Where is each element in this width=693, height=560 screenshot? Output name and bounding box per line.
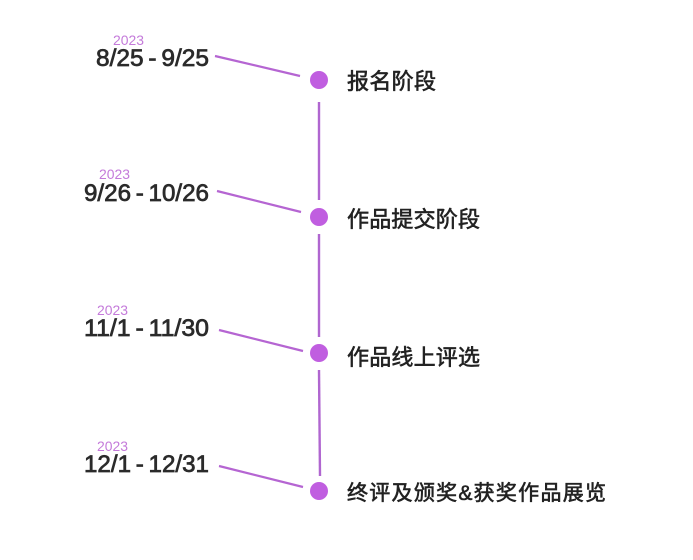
- stage 1: registration: 2023: [113, 32, 144, 48]
- stage 1: registration: 8/25 - 9/25: [96, 45, 209, 72]
- stage 2: submission: 9/26 - 10/26: [84, 180, 209, 207]
- stage 3: online review: [84, 302, 480, 370]
- stage 4: final review and awards: 终评及颁奖&获奖作品展览: [347, 482, 606, 505]
- stage 4: final review and awards: 2023: [97, 438, 128, 454]
- stage 4: final review and awards: 12/1 - 12/31: [84, 451, 209, 478]
- stage 4: final review and awards: [84, 438, 606, 505]
- stage 1: registration: 报名阶段: [347, 69, 436, 94]
- stage 3: online review: 2023: [97, 302, 128, 318]
- stage 2: submission: [84, 166, 480, 232]
- stage 2: submission: 2023: [99, 166, 130, 182]
- stage 3: online review: 作品线上评选: [347, 345, 480, 370]
- stage 2: submission: 作品提交阶段: [347, 207, 480, 232]
- timeline spine: [319, 102, 320, 476]
- stage 1: registration: [96, 32, 436, 94]
- stage 3: online review: 11/1 - 11/30: [84, 315, 209, 342]
